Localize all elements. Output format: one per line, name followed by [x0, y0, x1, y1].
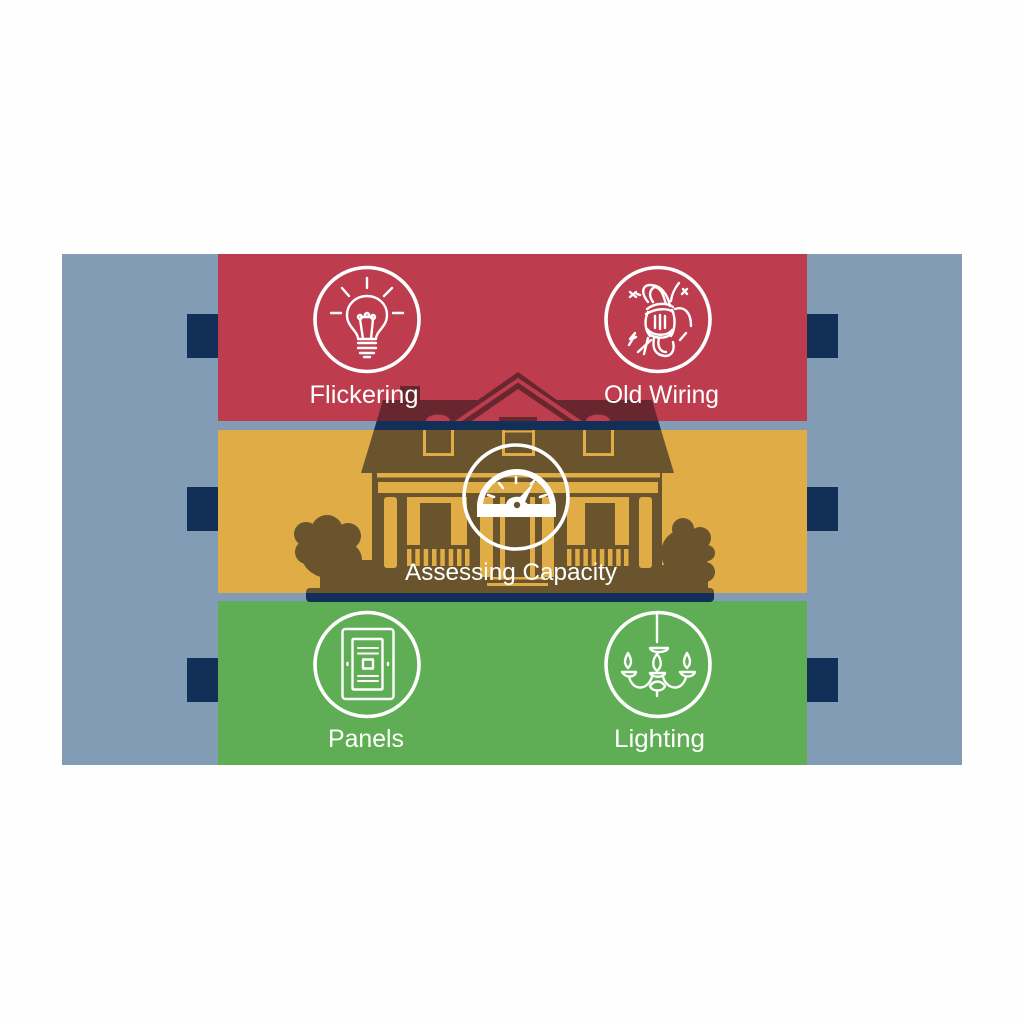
icon: chandelier [606, 612, 710, 716]
house silhouette [294, 372, 715, 602]
icon: capacity gauge [464, 445, 568, 549]
label: Panels: Panels [328, 725, 404, 753]
label: Assessing Capacity: Assessing Capacity [405, 559, 617, 586]
label: Old Wiring: Old Wiring [604, 381, 719, 409]
left navy tabs [187, 314, 218, 702]
panel: blue backdrop [62, 254, 962, 765]
icon: electrical panel [315, 612, 419, 716]
panel: red band [218, 254, 807, 421]
label: Flickering: Flickering [310, 381, 418, 409]
panel: yellow band [218, 430, 807, 593]
label: Lighting: Lighting [614, 725, 705, 753]
right navy tabs [807, 314, 838, 702]
panel: green band [218, 601, 807, 765]
icon: light bulb [315, 268, 419, 372]
icon: tangled old wiring [606, 268, 710, 372]
